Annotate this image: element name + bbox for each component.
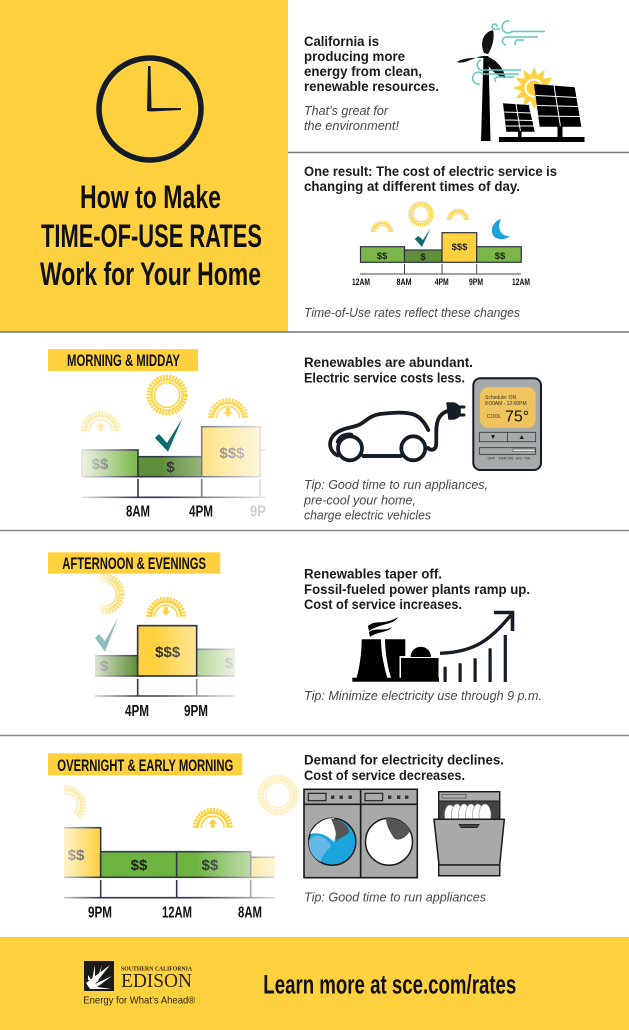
chart: morning rate bars: $ — [166, 459, 175, 476]
icon: thermostat: COOL — [487, 414, 501, 420]
title: Work for Your Home — [40, 256, 261, 292]
icon: washer and dryer — [304, 789, 417, 878]
heading: morning and midday — [48, 349, 198, 371]
chart: overnight rate bars: $$ — [202, 857, 219, 874]
icon: thermostat: 8:00AM - 12:00PM — [485, 401, 527, 407]
text block: California renewable intro: energy from clean, — [304, 64, 422, 79]
icon: rising sun — [83, 414, 118, 431]
chart: full day rate summary: $$ — [377, 251, 388, 262]
axis labels: 4PM — [189, 504, 213, 521]
text block: California renewable intro: producing more — [304, 49, 405, 64]
panel: yellow title block — [0, 0, 288, 332]
chart: full day rate summary: 8AM — [396, 277, 412, 288]
chart: full day rate summary: 12AM — [512, 277, 530, 288]
chart: overnight rate bars: $$ — [131, 857, 148, 874]
text block: renewables taper off: Renewables taper off. — [304, 566, 442, 581]
text block: cost changing heading — [304, 164, 557, 194]
text block: cost changing heading: changing at different times of day. — [304, 179, 520, 194]
caption: time-of-use rates: Time-of-Use rates reflect these changes — [304, 305, 520, 320]
chart: morning rate bars: $$$ — [219, 445, 245, 462]
logo: Southern California Edison: SOUTHERN CALIFORNIA — [121, 965, 192, 972]
icon: check mark — [415, 228, 431, 247]
axis labels — [126, 504, 266, 521]
axis labels: 9PM — [88, 904, 112, 921]
text block: renewables abundant — [304, 355, 473, 386]
title: How to Make — [80, 179, 221, 215]
tip: run appliances: Tip: Good time to run appliances — [304, 890, 486, 905]
icon: thermostat: ON — [524, 456, 530, 460]
axis labels: 9P — [250, 504, 266, 521]
tip: good time to run appliances: Tip: Good time to run appliances, — [304, 477, 488, 492]
tip: minimize electricity: Tip: Minimize electricity use through 9 p.m. — [304, 688, 542, 703]
axis labels — [125, 703, 208, 720]
heading: afternoon and evenings: AFTERNOON & EVENINGS — [62, 554, 206, 573]
text block: California renewable intro: California is — [304, 34, 379, 49]
panel: afternoon and evenings — [48, 552, 250, 720]
panel: overnight and early morning — [44, 753, 296, 921]
icon: sun — [149, 377, 185, 413]
icon: faded setting sun — [54, 780, 91, 817]
title — [40, 179, 262, 292]
icon: check mark — [155, 418, 183, 452]
axis labels: 8AM — [238, 904, 262, 921]
icon: clock — [99, 58, 201, 160]
call to action: Learn more at sce.com/rates — [263, 969, 516, 999]
chart: morning rate bars: $$ — [92, 456, 109, 473]
chart: full day rate summary — [352, 203, 530, 288]
text block: demand declines: Cost of service decreases. — [304, 768, 465, 783]
icon: moon — [492, 219, 510, 239]
icon: faded sun — [78, 574, 122, 620]
text block: renewables taper off: Cost of service increases. — [304, 597, 462, 612]
icon: faded check mark — [95, 618, 118, 652]
text block: renewables taper off: Fossil-fueled power plants ramp up. — [304, 582, 530, 597]
icon: thermostat: 75° — [505, 409, 529, 426]
icon: dishwasher — [434, 792, 504, 876]
chart: full day rate summary: $$ — [495, 251, 506, 262]
icon: setting sun — [210, 400, 246, 418]
text block: renewables abundant: Electric service costs less. — [304, 371, 465, 386]
tip: good time to run appliances: charge electric vehicles — [304, 507, 431, 522]
icon: thermostat: FAN ON — [499, 456, 513, 460]
chart: afternoon rate bars: $ — [225, 655, 234, 672]
chart: full day rate summary: 9PM — [469, 277, 483, 288]
icon: thermostat: OFF — [488, 456, 496, 460]
panel: footer — [0, 937, 629, 1030]
icon: electric car with plug — [330, 403, 464, 460]
text block: California renewable intro: renewable resources. — [304, 79, 439, 94]
logo: Southern California Edison — [83, 961, 196, 1007]
icon: faded sun — [260, 777, 296, 813]
icon: wind turbine and solar panels — [457, 21, 584, 142]
panel: morning and midday — [48, 349, 270, 521]
chart: full day rate summary: 12AM — [352, 277, 370, 288]
text block: demand declines: Demand for electricity declines. — [304, 752, 504, 767]
axis labels: 8AM — [126, 504, 150, 521]
axis labels — [88, 904, 262, 921]
text block: cost changing heading: One result: The cost of electric service is — [304, 164, 557, 179]
chart: full day rate summary: 4PM — [435, 277, 449, 288]
text block: renewables abundant: Renewables are abundant. — [304, 355, 473, 370]
chart: morning rate bars — [76, 424, 270, 500]
icon: setting sun — [148, 599, 184, 617]
chart: afternoon rate bars: $ — [100, 658, 109, 675]
text block: demand declines — [304, 752, 504, 783]
icon: thermostat: A/C — [516, 456, 523, 460]
axis labels: 12AM — [162, 904, 192, 921]
icon: thermostat: Schedule: ON — [485, 395, 517, 401]
logo: Southern California Edison: EDISON — [121, 970, 192, 992]
axis labels: 4PM — [125, 703, 149, 720]
title: TIME-OF-USE RATES — [41, 218, 262, 254]
heading: afternoon and evenings — [48, 552, 220, 574]
icon: power plant with rising cost arrow — [352, 612, 512, 682]
chart: overnight rate bars — [48, 820, 290, 902]
tip: good time to run appliances: pre-cool your home, — [303, 492, 416, 507]
text block: California renewable intro — [304, 34, 439, 133]
chart: overnight rate bars: $$ — [68, 847, 85, 864]
tip: good time to run appliances — [303, 477, 488, 522]
heading: morning and midday: MORNING & MIDDAY — [67, 351, 180, 370]
logo: Southern California Edison: Energy for What’s Ahead® — [83, 995, 196, 1007]
text block: renewables taper off — [304, 566, 530, 612]
text block: California renewable intro: the environment! — [304, 118, 399, 133]
heading: overnight and early morning — [48, 753, 242, 775]
heading: overnight and early morning: OVERNIGHT & EARLY MORNING — [57, 756, 233, 775]
chart: afternoon rate bars: $$$ — [155, 644, 181, 661]
chart: full day rate summary: $$$ — [452, 242, 468, 253]
chart: afternoon rate bars — [80, 624, 250, 702]
axis labels: 9PM — [184, 703, 208, 720]
text block: California renewable intro: That’s great for — [304, 103, 389, 118]
chart: full day rate summary: $ — [420, 252, 426, 263]
icon: rising sun — [195, 810, 230, 828]
icon: thermostat — [473, 378, 541, 470]
